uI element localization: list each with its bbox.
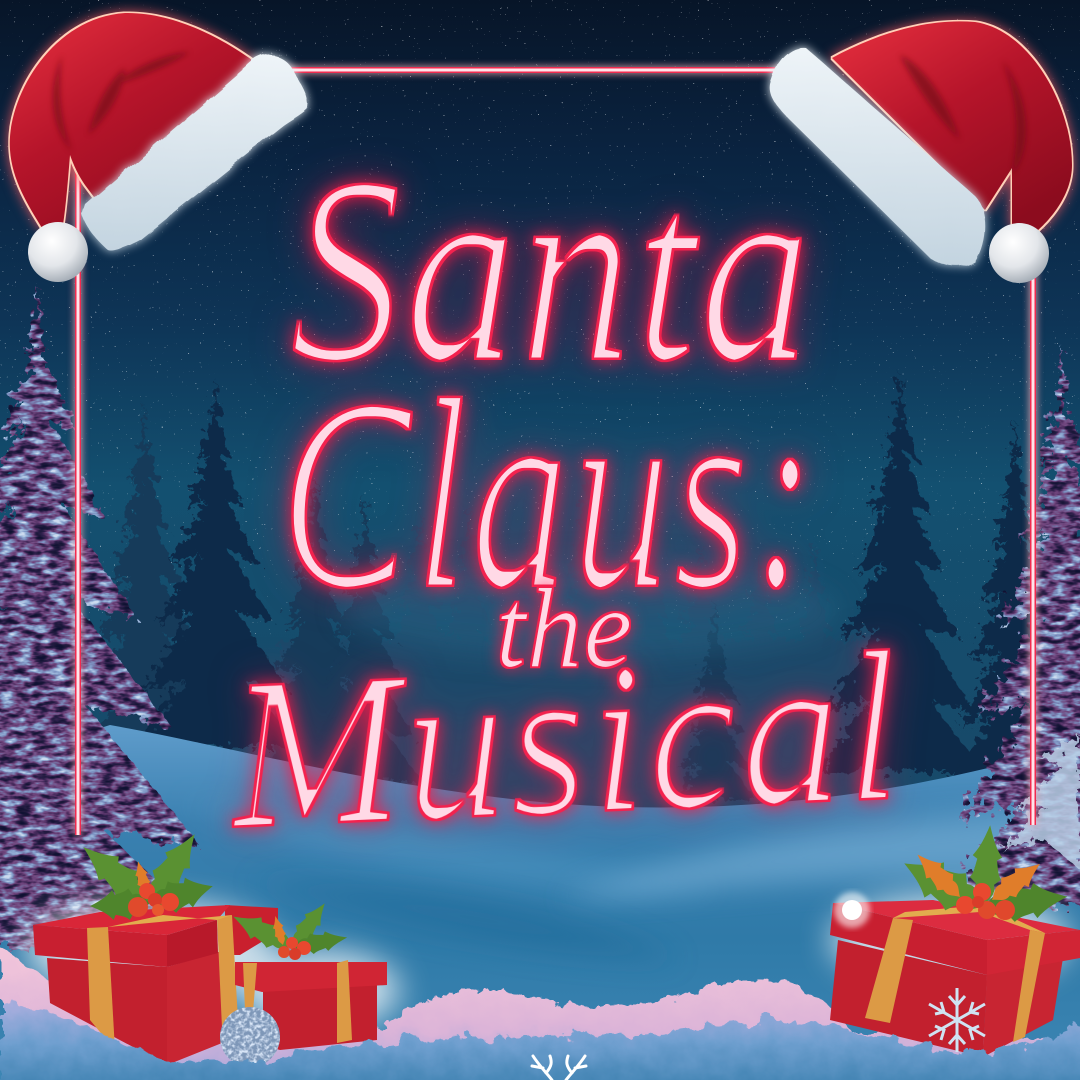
- hat body left: [10, 13, 255, 228]
- ribbon: [87, 927, 115, 1050]
- snowy ground: [0, 725, 1080, 1080]
- gift: right box: [830, 824, 1080, 1057]
- white halos behind gifts: [25, 895, 1070, 1030]
- box: [263, 985, 377, 1050]
- hat fold shadows left: [53, 52, 190, 152]
- hat: left Santa hat: [10, 13, 308, 282]
- silver bauble: [220, 1007, 280, 1067]
- frame red edge: [78, 70, 1033, 835]
- neon frame: [78, 70, 1033, 835]
- gift: large left box: [33, 826, 278, 1065]
- snowy fir tree right: [942, 345, 1080, 905]
- snow front edge: [0, 1000, 1080, 1080]
- title line: the: the: [495, 567, 633, 691]
- title line: Musical: Musical: [221, 608, 905, 872]
- distant misty forest: [280, 445, 862, 825]
- dark pine trees right: [815, 372, 1080, 780]
- lid top: [833, 900, 1080, 940]
- back lid: [225, 905, 278, 955]
- lid: [235, 962, 387, 992]
- lid right face: [167, 920, 218, 967]
- background: star field: [0, 0, 1080, 640]
- icon: reindeer antlers logo: [532, 1056, 586, 1080]
- pompom right: [989, 223, 1049, 283]
- holly sprig: [73, 826, 217, 922]
- hat fold shadows right: [900, 55, 1026, 175]
- pale snowy branches lower right: [1000, 735, 1080, 870]
- ribbons: [337, 960, 352, 1043]
- lid left face: [33, 925, 167, 967]
- snow drift highlights: [180, 800, 1040, 960]
- gift: small middle box: [220, 897, 387, 1067]
- hat body right: [832, 21, 1072, 232]
- snowflake: [929, 988, 985, 1052]
- lid right face: [987, 930, 1080, 975]
- title line: Claus: Claus:: [278, 345, 818, 644]
- title line: Santa: Santa: [288, 125, 813, 415]
- holly sprig: [894, 824, 1070, 926]
- box sides: [47, 958, 167, 1065]
- mid forest trees: [72, 405, 756, 800]
- fur band right: [770, 48, 985, 267]
- snow mounds foreground: [0, 950, 1080, 1080]
- forest fog: [340, 560, 840, 660]
- dark pine tree left: [130, 378, 300, 746]
- title: Santa Claus: the Musical: [221, 125, 905, 872]
- lid top: [33, 905, 230, 935]
- lid left face: [830, 903, 987, 975]
- fur band left: [83, 55, 308, 251]
- snowy fir tree left: [0, 285, 229, 949]
- box sides: [830, 940, 987, 1057]
- hat: right Santa hat: [770, 21, 1072, 283]
- sparkle: [834, 892, 870, 928]
- frame white core: [78, 70, 1033, 835]
- ribbons: [865, 918, 913, 1023]
- pompom left: [28, 222, 88, 282]
- holly sprig: [228, 897, 349, 960]
